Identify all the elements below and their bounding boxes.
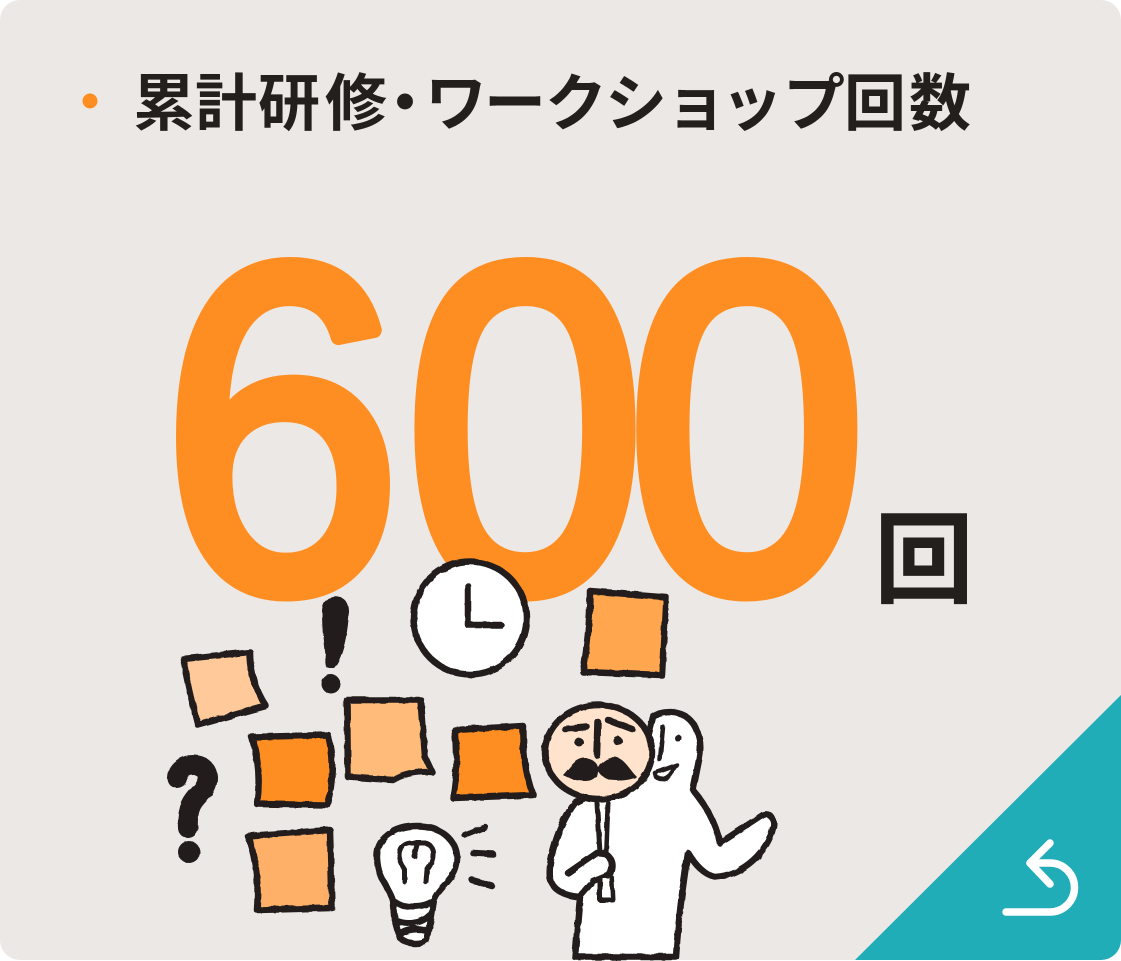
unit 回: 回 bbox=[874, 505, 974, 617]
sticky note 3 bbox=[347, 700, 432, 780]
bullet dot bbox=[82, 94, 98, 108]
sticky note 4 bbox=[453, 726, 533, 798]
mustache bbox=[563, 757, 637, 781]
corner button: teal triangle bbox=[855, 695, 1121, 960]
icon: clock bbox=[414, 562, 526, 674]
big number 600: 0 bbox=[627, 169, 867, 687]
body bbox=[550, 712, 774, 957]
sticky note 1 bbox=[183, 652, 266, 725]
big number 600: 6 bbox=[162, 169, 402, 687]
big number 600: 0 bbox=[405, 169, 645, 687]
icon: question mark bbox=[177, 765, 208, 863]
illustration: ideas and sticky notes bbox=[177, 562, 774, 957]
icon: return arrow bbox=[1006, 843, 1074, 912]
side face bbox=[655, 727, 677, 779]
mask bbox=[545, 705, 652, 799]
title: 累計研修・ワークショップ回数 bbox=[133, 70, 971, 139]
icon: exclamation mark bbox=[322, 596, 349, 694]
sticky note 5 bbox=[248, 830, 332, 910]
icon: light bulb bbox=[377, 826, 493, 944]
mask stick bbox=[597, 803, 613, 900]
sticky note 2 bbox=[252, 735, 332, 805]
character: person holding mustache mask bbox=[545, 705, 774, 957]
sticky note 6 bbox=[583, 591, 666, 675]
